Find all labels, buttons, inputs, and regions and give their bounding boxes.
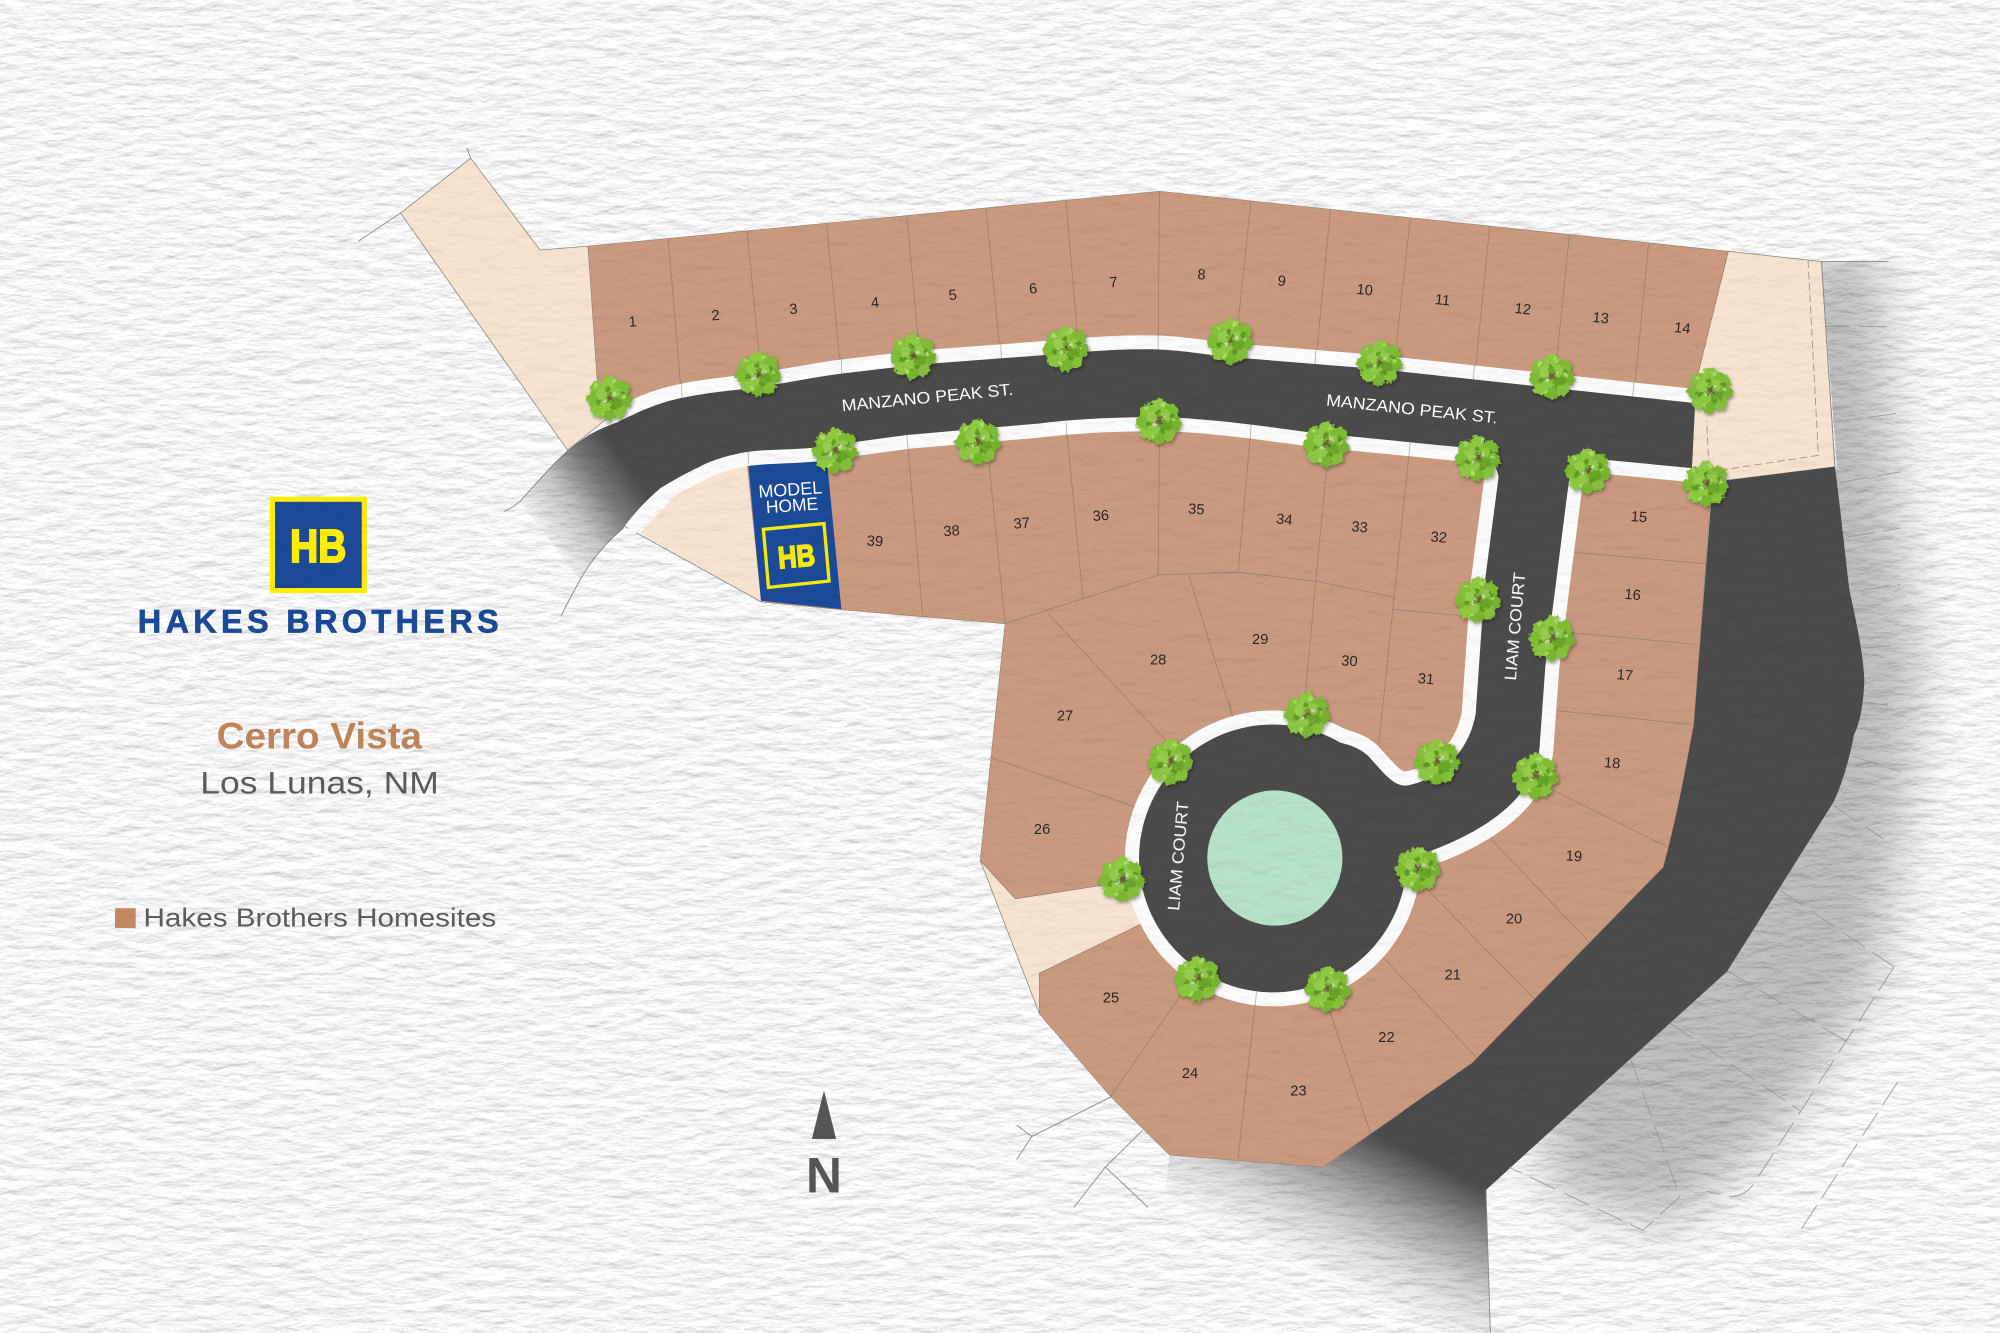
icon: tree <box>586 376 632 422</box>
arrow head <box>812 1091 836 1139</box>
lot 33: 33 <box>1351 519 1368 537</box>
icon: tree <box>955 419 1001 465</box>
north label: N <box>806 1148 842 1204</box>
street label: Manzano Peak St east: MANZANO PEAK ST. <box>1325 391 1499 427</box>
street labels <box>841 380 1529 911</box>
lot 13: 13 <box>1592 310 1610 328</box>
community name: Cerro Vista <box>217 716 422 757</box>
lot 34: 34 <box>1275 511 1293 529</box>
lot 8: 8 <box>1197 267 1206 284</box>
lot 24: 24 <box>1182 1066 1198 1082</box>
road: east arterial <box>1403 467 1864 1149</box>
road: Manzano Peak St and Liam Court <box>679 349 1695 992</box>
icon: tree <box>1357 340 1402 386</box>
icon: tree <box>1564 448 1610 494</box>
logo badge <box>272 499 364 591</box>
icon: tree <box>1395 846 1441 892</box>
lot 16: 16 <box>1624 587 1641 604</box>
soft shadow east of road <box>1531 242 1922 1227</box>
lot 28: 28 <box>1150 653 1166 669</box>
road fade at west end <box>520 398 699 580</box>
lot 35: 35 <box>1188 501 1205 519</box>
lot 39: 39 <box>866 533 884 550</box>
lot 15: 15 <box>1630 509 1648 526</box>
Liam Court stem <box>1273 466 1571 884</box>
lot 17: 17 <box>1616 667 1634 685</box>
lot 19: 19 <box>1565 849 1582 865</box>
street label: Manzano Peak St west: MANZANO PEAK ST. <box>841 380 1014 415</box>
icon: tree <box>1512 753 1558 799</box>
cul-de-sac <box>1139 724 1407 992</box>
icon: tree <box>890 334 936 379</box>
lot 21: 21 <box>1445 968 1461 984</box>
icon: tree <box>1099 857 1145 902</box>
icon: tree <box>1174 956 1220 1002</box>
icon: tree <box>1455 577 1501 623</box>
icon: tree <box>1414 739 1460 785</box>
common area: south-west <box>980 860 1151 1014</box>
model home label: HOME <box>765 494 819 517</box>
lot 20: 20 <box>1506 911 1522 927</box>
lot 9: 9 <box>1277 273 1287 290</box>
homesite parcels <box>588 191 1728 1167</box>
logo: Hakes Brothers <box>138 499 499 640</box>
icon: tree <box>1136 399 1182 445</box>
model home HB badge: HB <box>777 538 816 576</box>
model home label <box>758 477 824 518</box>
lot 18: 18 <box>1603 755 1621 773</box>
lot 38: 38 <box>943 523 960 540</box>
lot lines crossing sidewalks <box>682 334 1634 1008</box>
lot 4: 4 <box>870 295 880 312</box>
logo wordmark: HAKES BROTHERS <box>138 604 499 640</box>
icon: tree <box>1304 966 1350 1012</box>
lot 5: 5 <box>948 287 958 304</box>
lot 26: 26 <box>1034 822 1050 838</box>
lot 27: 27 <box>1057 709 1073 725</box>
model home HB badge <box>763 524 829 587</box>
lot 12: 12 <box>1514 301 1532 319</box>
lot 14: 14 <box>1673 320 1691 338</box>
icon: tree <box>1284 692 1330 738</box>
lot 22: 22 <box>1378 1030 1395 1046</box>
common-area parcels <box>401 158 1835 1014</box>
lot 1: 1 <box>628 314 638 331</box>
model home label: MODEL <box>758 477 823 502</box>
lot 36: 36 <box>1092 508 1110 525</box>
lot 2: 2 <box>711 308 720 324</box>
logo badge: HB <box>290 520 346 572</box>
lot 3: 3 <box>789 301 798 318</box>
street trees <box>586 318 1733 1012</box>
legend <box>115 905 496 933</box>
street label: Liam Court north: LIAM COURT <box>1501 572 1529 681</box>
lot 32: 32 <box>1430 529 1448 547</box>
lot 37: 37 <box>1013 515 1031 533</box>
lot 6: 6 <box>1028 281 1038 298</box>
lot 7: 7 <box>1109 275 1118 291</box>
lot 30: 30 <box>1341 653 1358 670</box>
icon: tree <box>1455 436 1501 482</box>
neighbouring parcel dashed lines <box>1509 327 1901 1230</box>
sidewalks <box>568 349 1695 992</box>
legend label: Hakes Brothers Homesites <box>143 905 496 933</box>
icon: tree <box>1043 326 1089 372</box>
lot numbers <box>628 267 1691 1100</box>
legend swatch <box>115 908 136 928</box>
icon: tree <box>1303 422 1349 467</box>
lot lines <box>668 191 1706 1159</box>
lot 29: 29 <box>1252 632 1268 648</box>
icon: tree <box>1683 461 1729 507</box>
homesites 1 to 14 block <box>588 191 1728 421</box>
icon: tree <box>735 351 781 397</box>
lot 11: 11 <box>1434 292 1451 310</box>
icon: tree <box>1687 368 1733 414</box>
icon: tree <box>812 428 858 474</box>
road fade to the south <box>1148 1063 1531 1333</box>
north arrow <box>806 1091 842 1204</box>
icon: tree <box>1147 739 1193 785</box>
model home parcel <box>748 457 841 609</box>
lot 31: 31 <box>1417 671 1435 688</box>
icon: tree <box>1529 354 1575 400</box>
common area: beside model home <box>640 462 761 602</box>
community location: Los Lunas, NM <box>200 764 439 800</box>
cul-de-sac green island <box>1207 790 1342 926</box>
lot 23: 23 <box>1290 1084 1307 1100</box>
common area: north-east <box>1691 251 1835 482</box>
street label: Liam Court south: LIAM COURT <box>1164 800 1192 911</box>
common area: north-west <box>401 158 607 450</box>
lot 25: 25 <box>1103 991 1119 1007</box>
lot 10: 10 <box>1356 282 1374 299</box>
Manzano Peak St <box>679 349 1695 478</box>
homesites 15 to 39 block <box>747 421 1712 1167</box>
boundary extension lines <box>358 148 1889 1333</box>
icon: tree <box>1207 318 1253 364</box>
icon: tree <box>1529 615 1575 661</box>
